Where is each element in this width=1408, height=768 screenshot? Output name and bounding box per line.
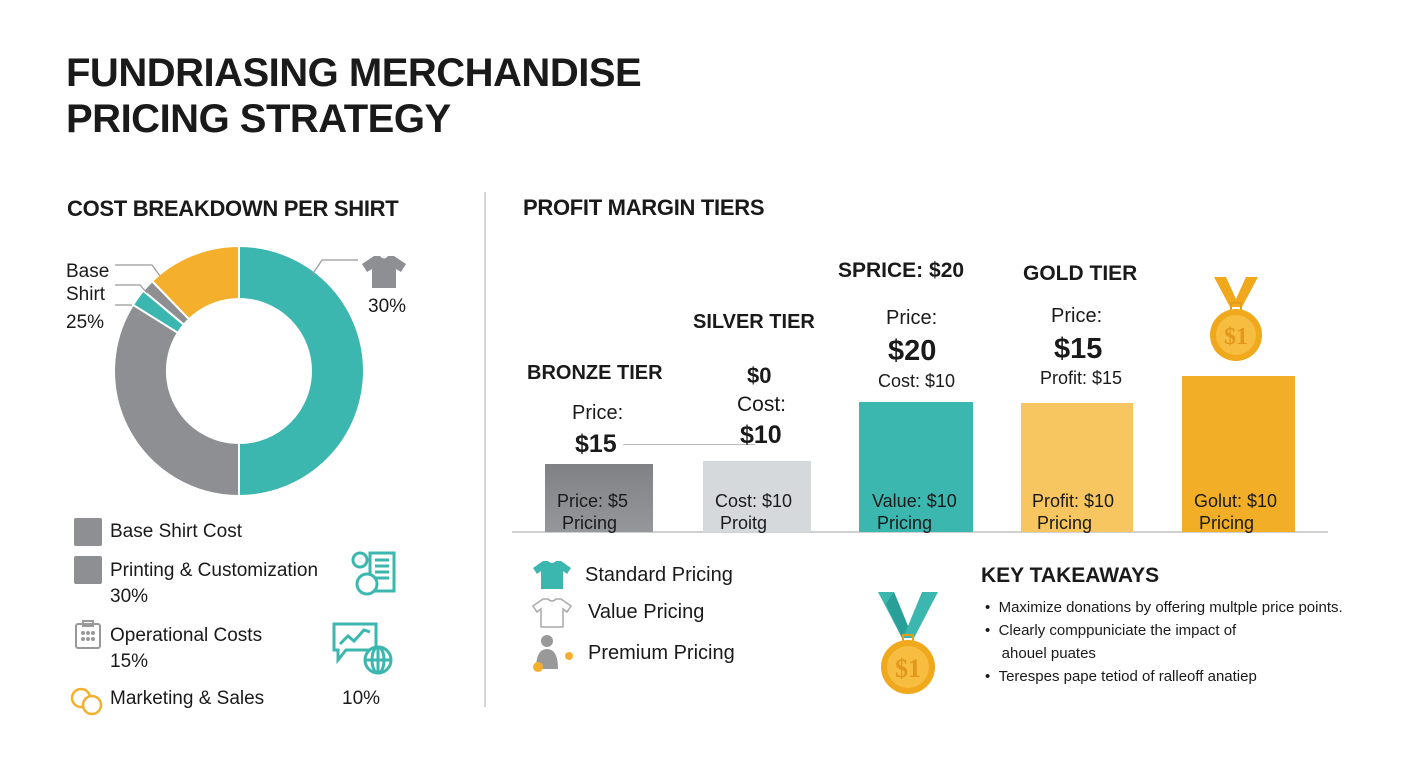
- bar: silver: Cost: $10: [715, 491, 792, 511]
- takeaways list: ahouel puates: [1002, 645, 1096, 662]
- label: silver tier: [693, 311, 815, 449]
- legend item: premium: Premium Pricing: [588, 642, 735, 664]
- legend item: marketing: [70, 688, 264, 716]
- legend item: premium: [533, 635, 735, 672]
- legend item: standard: Standard Pricing: [585, 564, 733, 586]
- legend item: value: Value Pricing: [588, 601, 704, 623]
- label: base shirt 25%: [66, 261, 109, 333]
- legend: [70, 518, 396, 716]
- bar: light gold: [1021, 403, 1133, 532]
- takeaways list: • Terespes pape tetiod of ralleoff anatiep: [985, 668, 1257, 685]
- legend item: operational: [75, 620, 262, 672]
- bar: silver: [703, 461, 811, 532]
- label: 30%: 30%: [368, 296, 406, 317]
- baseline: [512, 531, 1328, 533]
- panel: cost breakdown: [66, 196, 406, 716]
- legend item: printing: Printing & Customization: [110, 560, 318, 581]
- legend item: operational: Operational Costs: [110, 625, 262, 646]
- icon: teal medal: $1: [895, 654, 921, 683]
- icon: t-shirt: [362, 256, 406, 288]
- bar: gold: Pricing: [1199, 513, 1254, 533]
- label: bronze tier: [527, 362, 755, 458]
- bar: teal: Value: $10: [872, 491, 957, 511]
- label: silver tier: SILVER TIER: [693, 311, 815, 333]
- legend: pricing types: [532, 561, 735, 672]
- label: sprice $20: SPRICE: $20: [838, 259, 964, 282]
- bar: gold: [1182, 376, 1295, 532]
- legend item: printing: 30%: [110, 586, 148, 607]
- legend item: base shirt cost: Base Shirt Cost: [110, 521, 242, 542]
- label: 10%: 10%: [342, 688, 380, 709]
- bar: gold: Golut: $10: [1194, 491, 1277, 511]
- bar: bronze: Pricing: [562, 513, 617, 533]
- title: FUNDRIASING MERCHANDISE: [66, 51, 641, 95]
- heading: profit margin tiers: PROFIT MARGIN TIERS: [523, 195, 764, 220]
- icon: chart globe: [332, 622, 392, 674]
- label: gold tier: [1023, 262, 1137, 388]
- label: gold tier: Profit: $15: [1040, 368, 1122, 388]
- icon: printing: [352, 552, 396, 596]
- bar: silver: Proitg: [720, 513, 767, 533]
- divider: [484, 192, 486, 707]
- bar: teal: [859, 402, 973, 532]
- bar: teal: Pricing: [877, 513, 932, 533]
- label: sprice $20: $20: [888, 335, 936, 367]
- label: gold tier: GOLD TIER: [1023, 262, 1137, 285]
- label: sprice $20: Price:: [886, 307, 937, 329]
- bar: light gold: Pricing: [1037, 513, 1092, 533]
- label: base shirt 25%: Base: [66, 261, 109, 282]
- legend item: base shirt cost: [74, 518, 242, 546]
- label: sprice $20: Cost: $10: [878, 371, 955, 391]
- legend item: operational: 15%: [110, 651, 148, 672]
- legend item: marketing: Marketing & Sales: [110, 688, 264, 709]
- icon: teal medal: [878, 592, 938, 694]
- title: [66, 51, 641, 141]
- label: base shirt 25%: 25%: [66, 312, 104, 333]
- bar: light gold: Profit: $10: [1032, 491, 1114, 511]
- label: base shirt 25%: Shirt: [66, 284, 105, 305]
- label: silver tier: $0: [747, 363, 771, 388]
- takeaways list: [985, 599, 1343, 685]
- label: bronze tier: Price:: [572, 402, 623, 424]
- bar: bronze: [545, 464, 653, 532]
- takeaways list: • Clearly comppuniciate the impact of: [985, 622, 1236, 639]
- legend item: standard: [533, 561, 733, 589]
- label: bronze tier: BRONZE TIER: [527, 362, 663, 384]
- heading: cost breakdown: COST BREAKDOWN PER SHIRT: [67, 196, 398, 221]
- bar chart: [512, 376, 1328, 533]
- legend item: printing: [74, 556, 318, 607]
- panel: profit margin tiers: [512, 195, 1343, 694]
- label: bronze tier: $15: [575, 430, 617, 458]
- legend item: value: [532, 598, 704, 628]
- key takeaways: [981, 564, 1343, 685]
- icon: gold medal top: $1: [1224, 324, 1248, 350]
- takeaways list: • Maximize donations by offering multple price points.: [985, 599, 1343, 616]
- label: silver tier: Cost:: [737, 393, 786, 416]
- bar: bronze: Price: $5: [557, 491, 628, 511]
- label: sprice $20: [838, 259, 964, 391]
- label: silver tier: $10: [740, 421, 782, 449]
- heading: key takeaways: KEY TAKEAWAYS: [981, 564, 1159, 587]
- donut chart: [115, 247, 363, 495]
- icon: gold medal top: [1210, 277, 1262, 361]
- label: gold tier: $15: [1054, 333, 1102, 365]
- title: PRICING STRATEGY: [66, 97, 451, 141]
- label: gold tier: Price:: [1051, 305, 1102, 327]
